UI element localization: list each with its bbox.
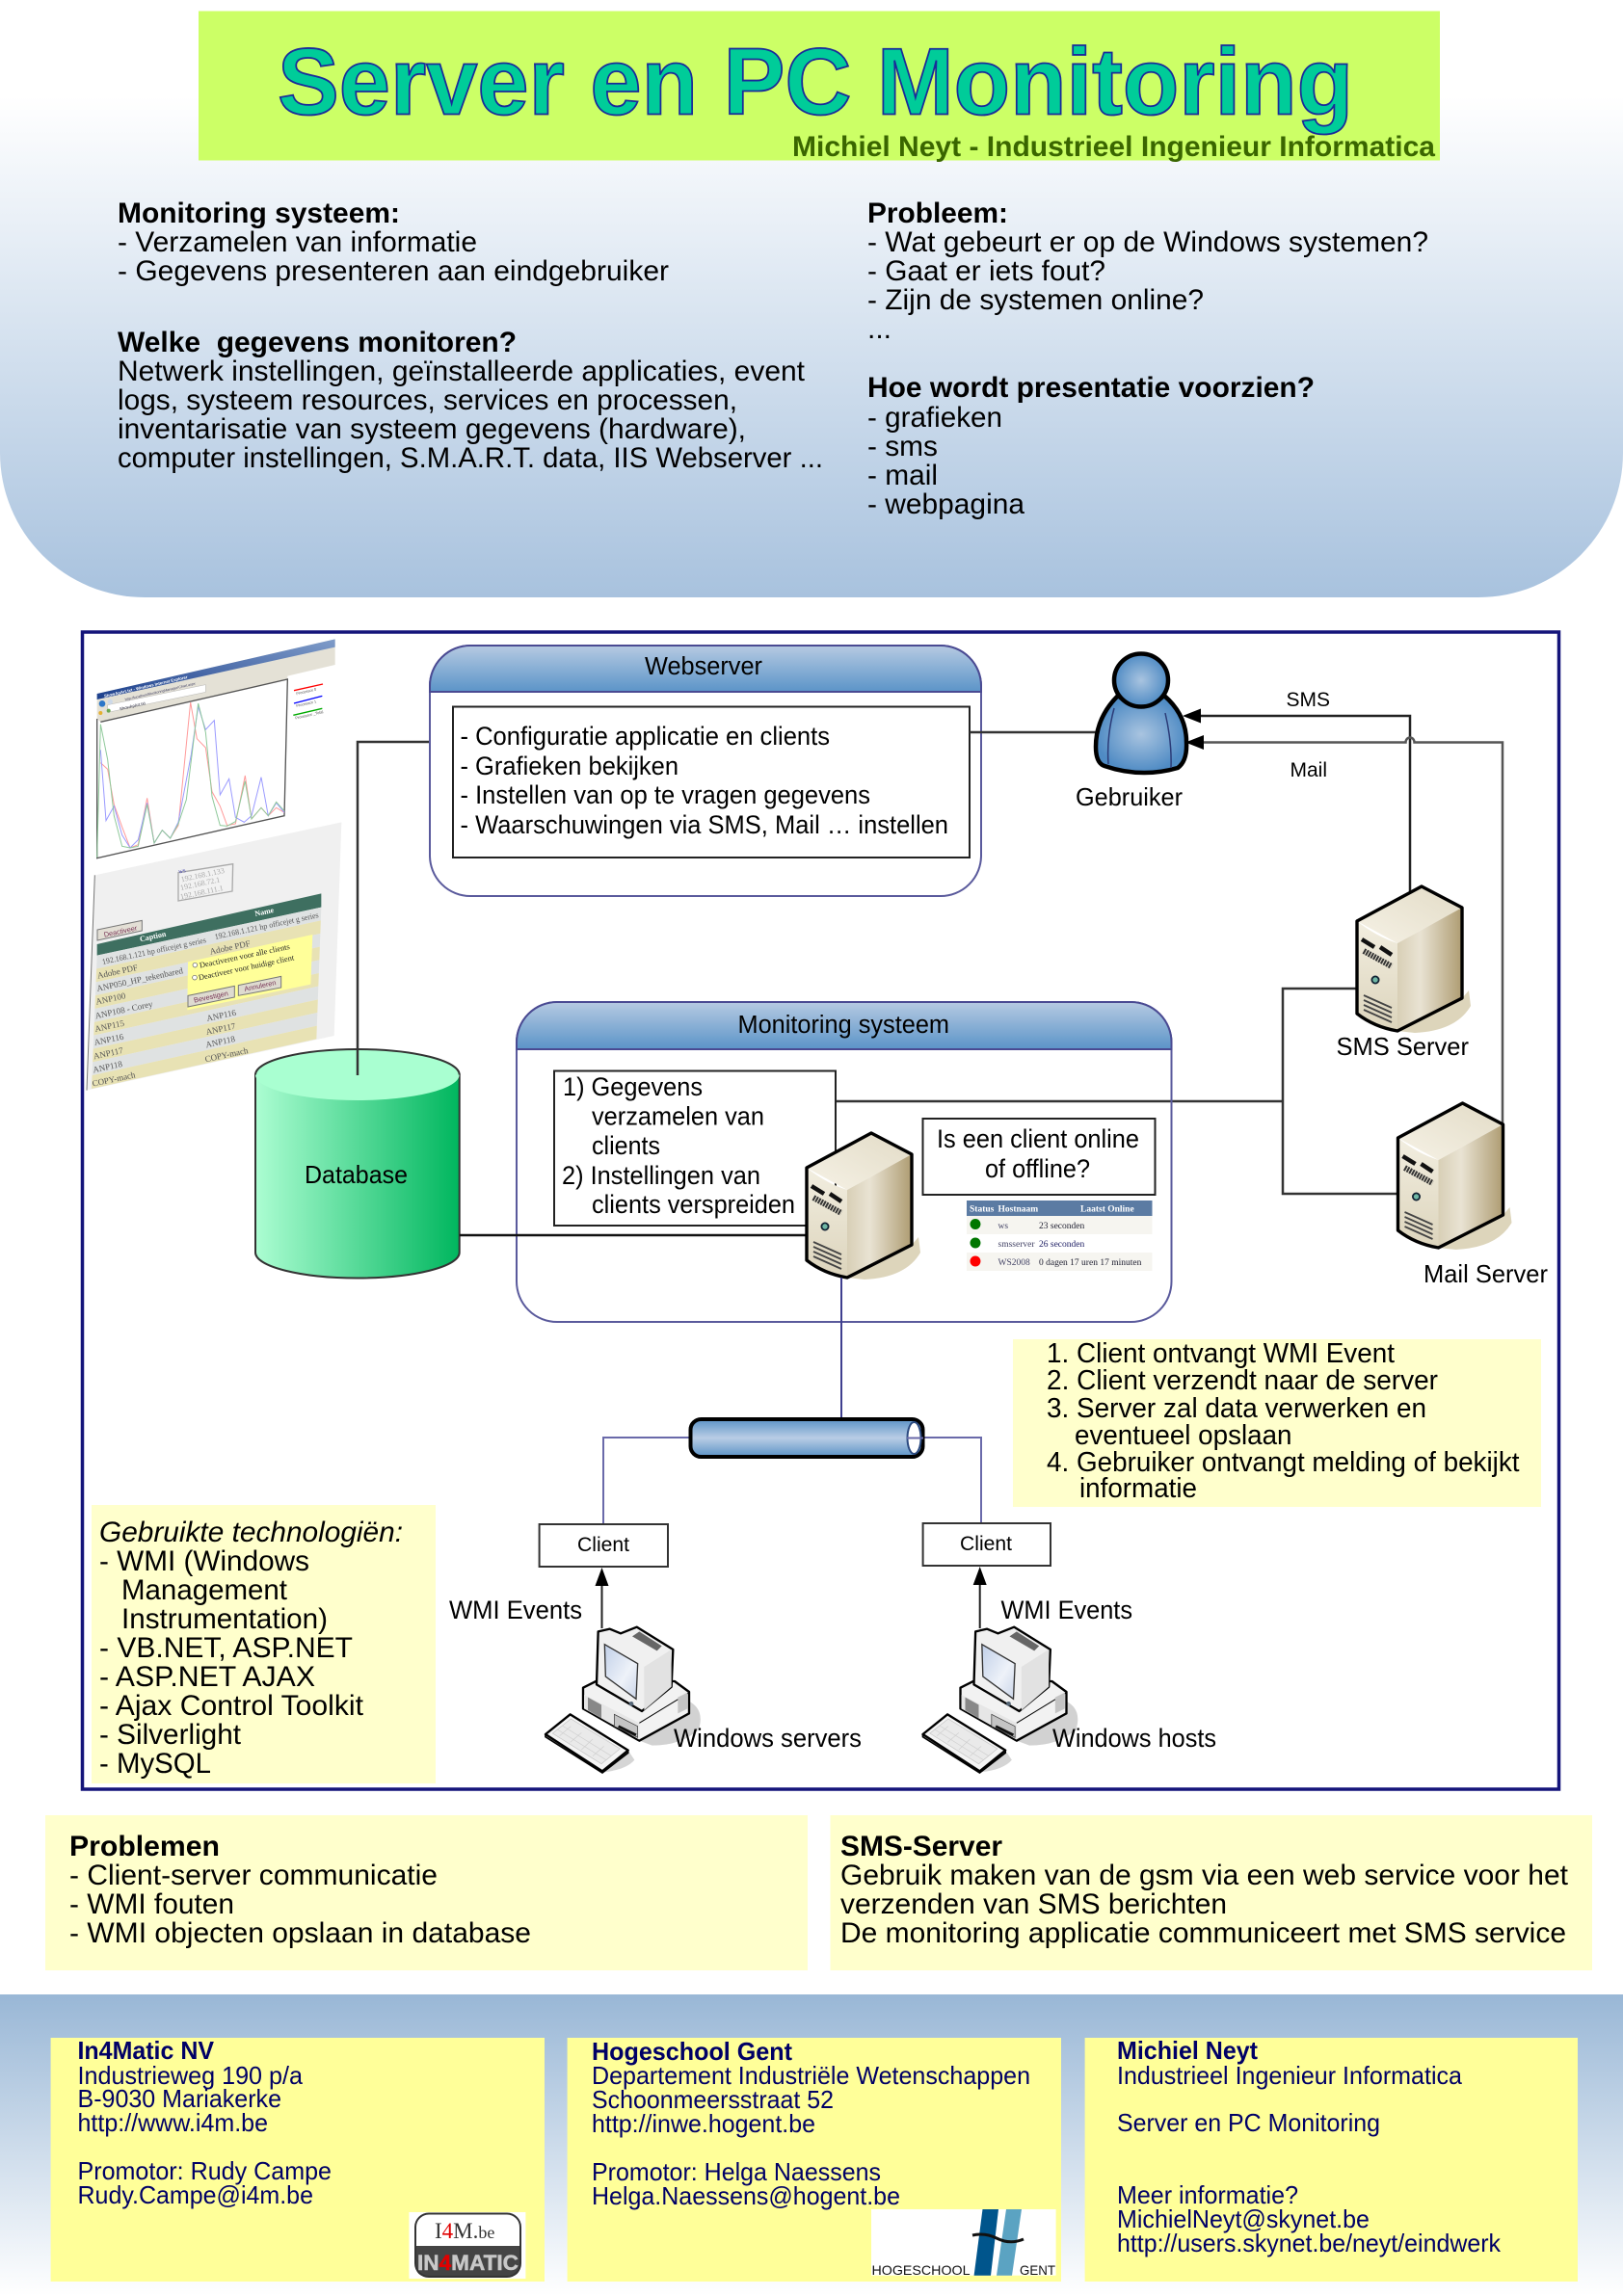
footer card: in4matic: Rudy.Campe@i4m.be <box>77 2180 313 2209</box>
text box: online of offline: of offline? <box>985 1154 1090 1183</box>
panel: sms-server <box>831 1815 1592 1970</box>
connector: database to server <box>460 1234 810 1236</box>
icon: network pipe <box>690 1419 923 1457</box>
icon: gebruiker <box>1096 653 1186 773</box>
text box: webserver functies: - Configuratie applicatie en clients <box>461 722 830 751</box>
label: sms server: SMS Server <box>1336 1032 1469 1061</box>
label: windows hosts: Windows hosts <box>1052 1724 1216 1753</box>
client box right <box>923 1523 1051 1566</box>
icon: mail server <box>1397 1103 1511 1250</box>
connector: webserver to gebruiker <box>970 731 1099 733</box>
label: database: Database <box>305 1160 408 1189</box>
table: status clients: Laatst Online <box>1080 1204 1134 1214</box>
footer card: michiel neyt: Michiel Neyt <box>1117 2036 1258 2065</box>
screenshot: clients table: ANP117 <box>205 1021 237 1037</box>
diagram frame <box>83 632 1559 1789</box>
title: Server en PC Monitoring <box>278 29 1353 135</box>
top gradient panel <box>0 96 1623 597</box>
panel: sms-server: Gebruik maken van de gsm via een web service voor het <box>840 1860 1569 1891</box>
logo: i4m <box>409 2212 525 2279</box>
steps callout: 1. Client ontvangt WMI Event <box>1047 1338 1395 1369</box>
footer card: hogeschool gent: Helga.Naessens@hogent.be <box>592 2181 900 2210</box>
text block: monitoring systeem: - Gegevens presenteren aan eindgebruiker <box>118 255 669 287</box>
title banner <box>199 12 1440 163</box>
screenshot: clients table: Adobe PDF <box>209 938 252 957</box>
text block: probleem: Probleem: <box>867 198 1008 229</box>
text block: welke gegevens monitoren <box>118 327 823 474</box>
screenshot: browser chart: Processor 0 <box>296 686 317 696</box>
footer card: hogeschool gent <box>568 2037 1061 2282</box>
text block: monitoring systeem: Monitoring systeem: <box>118 198 400 229</box>
label: SMS: SMS <box>1286 689 1330 711</box>
steps callout: 3. Server zal data verwerken en <box>1047 1393 1426 1424</box>
table: status clients: Hostnaam <box>998 1204 1038 1214</box>
screenshot: browser chart: Processor 1 <box>296 699 317 708</box>
heading: monitoring systeem: Monitoring systeem <box>738 1012 949 1039</box>
screenshot: clients table: ws <box>178 867 187 876</box>
screenshot: browser chart <box>97 639 335 858</box>
screenshot: clients table: ANP108 - Corey <box>94 999 154 1020</box>
gebruikte technologieen callout: - MySQL <box>99 1748 211 1780</box>
icon: sms server <box>1357 886 1471 1033</box>
connector: mail server to gebruiker <box>1185 735 1503 1127</box>
text block: welke gegevens monitoren: logs, systeem resources, services en processen, <box>118 384 737 416</box>
gebruikte technologieen callout: - ASP.NET AJAX <box>99 1661 315 1693</box>
screenshot: clients table: ANP100 <box>94 990 127 1007</box>
screenshot: clients table: ANP115 <box>93 1018 125 1034</box>
screenshot: clients table: ANP116 <box>93 1032 125 1047</box>
icon: windows host pc <box>922 1627 1078 1773</box>
footer card: in4matic <box>51 2036 545 2282</box>
screenshot: clients table: Caption <box>139 930 168 943</box>
screenshot: browser chart: ShowApArt.txt <box>119 700 146 711</box>
screenshot: clients table: ANP118 <box>204 1034 236 1049</box>
text box: webserver functies: - Instellen van op te vragen gegevens <box>461 780 870 809</box>
screenshot: clients table: Deactiveer <box>103 923 139 939</box>
logo: hogeschool gent <box>871 2209 1056 2278</box>
gebruikte technologieen callout: Instrumentation) <box>121 1603 328 1635</box>
text block: welke gegevens monitoren: computer instellingen, S.M.A.R.T. data, IIS Webserver ... <box>118 442 823 474</box>
screenshot: browser chart: Processor _Total <box>295 709 324 721</box>
screenshot: clients table: Annuleren <box>244 978 277 993</box>
text box: online of offline <box>923 1119 1155 1195</box>
footer card: in4matic: B-9030 Mariakerke <box>77 2084 281 2113</box>
panel: problemen: Problemen <box>69 1831 220 1862</box>
screenshot: browser chart: ShowApArt.txt - Windows Internet Explorer <box>103 674 188 699</box>
client box left: Client <box>577 1534 629 1556</box>
screenshot: clients table: 192.168.1.121 hp officejet g series <box>214 910 319 941</box>
icon: windows server pc <box>545 1627 701 1773</box>
table: status clients <box>967 1201 1153 1271</box>
connector: webserver to database <box>358 742 430 1075</box>
screenshot: clients table: Adobe PDF <box>96 963 139 981</box>
subtitle: Michiel Neyt - Industrieel Ingenieur Informatica <box>792 131 1435 163</box>
text box: gegevens verzamelen: 2) Instellingen van <box>562 1161 760 1190</box>
arrow: wmi events left <box>596 1568 609 1628</box>
text box: gegevens verzamelen: clients verspreiden <box>592 1190 795 1219</box>
table: status clients: Status <box>970 1204 995 1214</box>
connector: monitoring to sms and mail server <box>836 989 1397 1194</box>
footer card: in4matic: In4Matic NV <box>77 2036 215 2065</box>
text block: probleem: - Zijn de systemen online? <box>867 284 1204 316</box>
arrow: wmi events right <box>973 1567 987 1628</box>
panel: problemen: - Client-server communicatie <box>69 1860 438 1891</box>
text box: gegevens verzamelen <box>554 1071 836 1226</box>
text box: gegevens verzamelen: clients <box>592 1131 660 1160</box>
gebruikte technologieen callout: - WMI (Windows <box>99 1545 309 1577</box>
table: status clients: 23 seconden <box>1039 1222 1084 1231</box>
footer card: hogeschool gent: Hogeschool Gent <box>592 2037 792 2066</box>
connector: database vertical stub <box>357 1049 359 1075</box>
steps callout <box>1013 1338 1541 1507</box>
panel: sms-server: verzenden van SMS berichten <box>840 1888 1227 1920</box>
footer card: hogeschool gent: Departement Industriële Wetenschappen <box>592 2061 1030 2090</box>
screenshot: browser chart: http://localhost/MonitoringManager/Chart.aspx <box>124 682 196 701</box>
table: status clients: 0 dagen 17 uren 17 minuten <box>1039 1258 1142 1268</box>
screenshot: clients table: COPY-mach <box>204 1045 250 1064</box>
table: status clients: smsserver <box>998 1240 1035 1250</box>
screenshot: clients table: Name <box>254 906 275 918</box>
panel: problemen <box>45 1815 808 1970</box>
screenshot: clients table: Deactiveer voor huidige client <box>198 953 296 982</box>
screenshot: clients table: 192.168.1.121 hp officejet g series <box>101 936 207 966</box>
steps callout: 2. Client verzendt naar de server <box>1047 1365 1438 1396</box>
text block: probleem: - Wat gebeurt er op de Windows systemen? <box>867 226 1428 258</box>
table: status clients: WS2008 <box>998 1258 1030 1268</box>
text block: monitoring systeem: - Verzamelen van informatie <box>118 226 477 258</box>
screenshot: clients table: Bevestigen <box>193 989 229 1005</box>
footer card: in4matic: Industrieweg 190 p/a <box>77 2061 304 2090</box>
gebruikte technologieen callout: Management <box>121 1574 288 1606</box>
text box: webserver functies: - Grafieken bekijken <box>461 752 678 780</box>
text block: welke gegevens monitoren: Welke gegevens monitoren? <box>118 327 517 358</box>
label: Mail: Mail <box>1290 759 1327 781</box>
footer card: michiel neyt: Server en PC Monitoring <box>1117 2108 1380 2137</box>
text block: presentatie: - mail <box>867 460 938 491</box>
table: status clients: ws <box>998 1222 1008 1231</box>
footer card: michiel neyt <box>1085 2036 1578 2282</box>
gebruikte technologieen callout <box>92 1505 436 1783</box>
gebruikte technologieen callout: - Ajax Control Toolkit <box>99 1690 364 1722</box>
label: gebruiker: Gebruiker <box>1076 782 1183 811</box>
footer card: hogeschool gent: http://inwe.hogent.be <box>592 2109 815 2138</box>
gebruikte technologieen callout: - Silverlight <box>99 1719 242 1751</box>
panel: problemen: - WMI fouten <box>69 1888 234 1920</box>
network line: server to pipe <box>840 1278 842 1419</box>
footer card: michiel neyt: MichielNeyt@skynet.be <box>1117 2204 1370 2233</box>
label: windows servers: Windows servers <box>674 1724 862 1753</box>
text block: welke gegevens monitoren: inventarisatie van systeem gegevens (hardware), <box>118 413 746 445</box>
footer card: michiel neyt: Industrieel Ingenieur Informatica <box>1117 2061 1463 2090</box>
footer card: michiel neyt: http://users.skynet.be/neyt/eindwerk <box>1117 2229 1502 2257</box>
table: status clients: 26 seconden <box>1039 1240 1084 1250</box>
screenshot: clients table: ANP118 <box>92 1059 123 1074</box>
client box left <box>540 1524 668 1567</box>
steps callout: eventueel opslaan <box>1075 1420 1291 1451</box>
screenshot: clients table: 192.168.1.133 <box>180 866 226 884</box>
text block: presentatie: - grafieken <box>867 402 1002 434</box>
client box right: Client <box>960 1533 1012 1555</box>
icon: monitoring server <box>807 1133 920 1280</box>
footer card: hogeschool gent: Schoonmeersstraat 52 <box>592 2085 834 2114</box>
text block: presentatie: Hoe wordt presentatie voorzien? <box>867 372 1315 404</box>
screenshot: clients table: ANP050_HP_tekenbared <box>95 965 184 993</box>
text box: webserver functies: - Waarschuwingen via SMS, Mail … instellen <box>461 810 948 839</box>
connector: sms server to gebruiker <box>1183 709 1410 891</box>
text block: probleem: ... <box>867 313 891 345</box>
footer card: michiel neyt: Meer informatie? <box>1117 2180 1298 2209</box>
text block: probleem <box>867 198 1428 345</box>
label: wmi events left: WMI Events <box>449 1596 582 1624</box>
heading: webserver: Webserver <box>645 653 762 680</box>
text block: presentatie <box>867 372 1315 520</box>
panel: sms-server: De monitoring applicatie communiceert met SMS service <box>840 1917 1566 1949</box>
panel: webserver <box>430 646 981 896</box>
footer band <box>0 1994 1623 2296</box>
screenshot: clients table: 192.168.111.1 <box>179 884 224 901</box>
screenshot: clients table: Deactiveren voor alle clients <box>199 942 290 970</box>
text box: webserver functies <box>453 707 970 858</box>
gebruikte technologieen callout: - VB.NET, ASP.NET <box>99 1632 353 1664</box>
footer card: in4matic: Promotor: Rudy Campe <box>77 2156 332 2185</box>
text block: presentatie: - webpagina <box>867 488 1024 520</box>
footer card: hogeschool gent: Promotor: Helga Naessens <box>592 2157 881 2186</box>
footer card: in4matic: http://www.i4m.be <box>77 2108 268 2137</box>
text block: presentatie: - sms <box>867 431 938 462</box>
text box: gegevens verzamelen: verzamelen van <box>592 1102 764 1131</box>
screenshot: clients table: COPY-mach <box>92 1069 137 1089</box>
network lines: pipe to clients <box>603 1438 981 1524</box>
logo: i4m: IN4MATIC <box>417 2251 519 2275</box>
label: mail server: Mail Server <box>1423 1259 1548 1288</box>
logo: i4m: I4M.be <box>435 2219 494 2243</box>
gebruikte technologieen callout: Gebruikte technologiën: <box>99 1517 403 1548</box>
text block: monitoring systeem <box>118 198 669 287</box>
logo: hogeschool gent: HOGESCHOOL <box>871 2262 971 2278</box>
panel: monitoring systeem <box>517 1002 1172 1322</box>
logo: hogeschool gent: GENT <box>1020 2262 1055 2278</box>
label: wmi events right: WMI Events <box>1000 1596 1132 1624</box>
database <box>255 1049 460 1278</box>
steps callout: informatie <box>1079 1473 1197 1504</box>
screenshot: clients table <box>87 822 341 1091</box>
screenshot: clients table: 192.168.72.1 <box>179 875 221 892</box>
panel: problemen: - WMI objecten opslaan in database <box>69 1917 531 1949</box>
text block: welke gegevens monitoren: Netwerk instellingen, geïnstalleerde applicaties, event <box>118 356 806 387</box>
text block: probleem: - Gaat er iets fout? <box>867 255 1105 287</box>
screenshot: clients table: ANP117 <box>93 1045 124 1061</box>
steps callout: 4. Gebruiker ontvangt melding of bekijkt <box>1047 1447 1519 1478</box>
text box: online of offline: Is een client online <box>937 1124 1139 1153</box>
text box: gegevens verzamelen: 1) Gegevens <box>563 1072 703 1101</box>
screenshot: clients table: ANP116 <box>205 1008 237 1023</box>
panel: sms-server: SMS-Server <box>840 1831 1002 1862</box>
